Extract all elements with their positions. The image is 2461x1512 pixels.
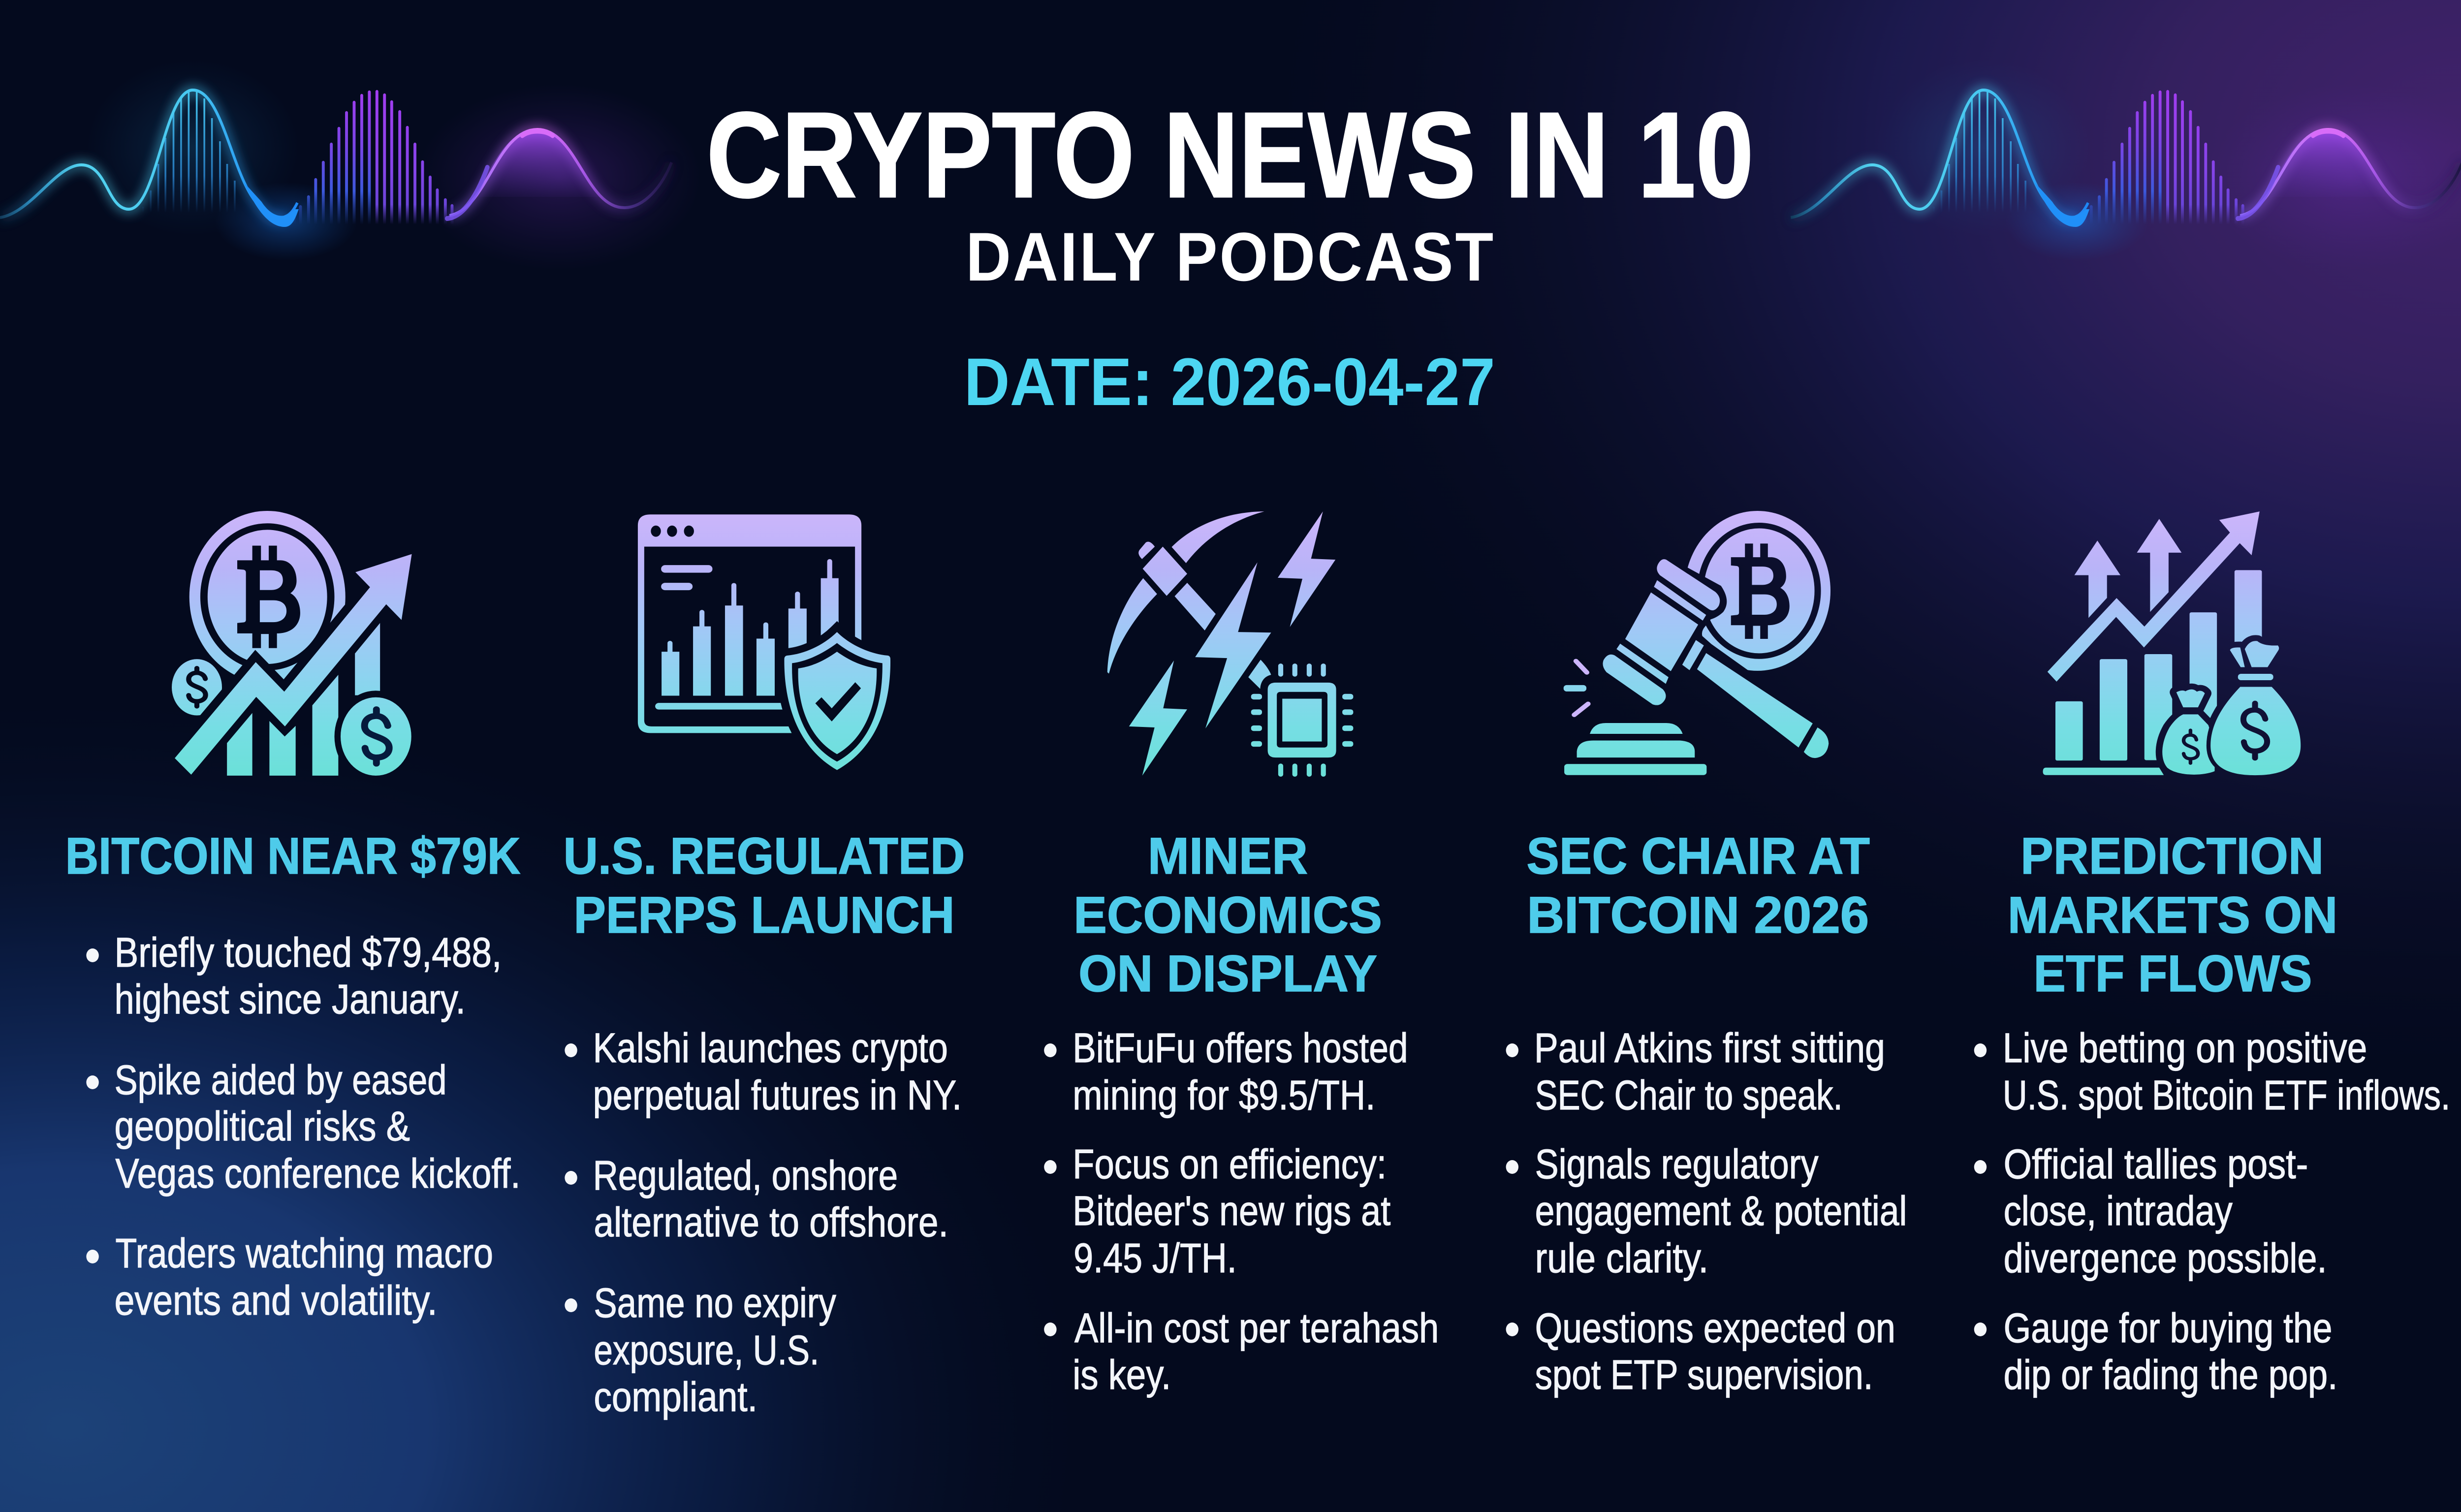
subtitle: DAILY PODCAST (966, 219, 1493, 295)
bullet 2: Official tallies post- (2004, 1141, 2308, 1188)
bullet 2 (565, 1153, 948, 1246)
bullet 3: is key. (1073, 1352, 1171, 1398)
heading (1073, 827, 1382, 1003)
bullet 3: Questions expected on (1535, 1305, 1895, 1352)
bullet 2 (1044, 1141, 1390, 1282)
heading: BITCOIN NEAR $79K (65, 827, 520, 885)
bullet 1: BitFuFu offers hosted (1073, 1025, 1408, 1071)
bullet 3 (1506, 1305, 1895, 1398)
bullet 3: Traders watching macro (115, 1230, 493, 1277)
panel: miner economics (1044, 511, 1439, 1398)
waveform: right (1791, 59, 2461, 271)
bullet 3 (1974, 1305, 2337, 1398)
bullet 2: 9.45 J/TH. (1073, 1235, 1237, 1282)
panel: bitcoin near 79k (65, 511, 520, 1324)
panel: sec chair (1506, 511, 1907, 1398)
heading (1526, 827, 1870, 944)
bullet 1: Paul Atkins first sitting (1534, 1025, 1885, 1071)
bullet 2: geopolitical risks & (115, 1103, 410, 1150)
bullet 3: events and volatility. (115, 1278, 437, 1324)
bullet 2: rule clarity. (1535, 1235, 1708, 1282)
bullet 1: Kalshi launches crypto (593, 1025, 948, 1071)
bullet 3: dip or fading the pop. (2004, 1352, 2337, 1398)
heading: MARKETS ON (2008, 886, 2337, 944)
icon: gavel and bitcoin (1564, 511, 1830, 775)
bullet 3 (565, 1280, 836, 1420)
heading: ECONOMICS (1073, 886, 1382, 944)
bullet 1 (565, 1025, 962, 1119)
bullet 3: spot ETP supervision. (1535, 1352, 1873, 1398)
title: CRYPTO NEWS IN 10 (706, 87, 1754, 223)
bullet 1 (1506, 1025, 1885, 1119)
bullet 2: divergence possible. (2004, 1235, 2327, 1282)
bullet 1 (86, 930, 502, 1023)
bullet 3: exposure, U.S. (594, 1327, 819, 1374)
bullet 1: highest since January. (115, 976, 466, 1023)
bullet 1: perpetual futures in NY. (593, 1072, 962, 1119)
bullet 1: Live betting on positive (2003, 1025, 2367, 1071)
bullet 1: Briefly touched $79,488, (115, 930, 502, 976)
bullet 3: compliant. (594, 1374, 757, 1420)
bullet 2: alternative to offshore. (594, 1199, 948, 1246)
bullet 2 (1974, 1141, 2327, 1282)
bullet 2: engagement & potential (1535, 1188, 1907, 1234)
bullet 2: Focus on efficiency: (1073, 1141, 1387, 1188)
heading: BITCOIN 2026 (1527, 886, 1869, 944)
panel: prediction markets (1974, 511, 2450, 1398)
bullet 2: Spike aided by eased (115, 1057, 447, 1103)
bullet 1: SEC Chair to speak. (1535, 1072, 1843, 1119)
bullet 3 (86, 1230, 493, 1324)
heading (564, 827, 965, 944)
icon: bitcoin coin with rising arrow (172, 511, 412, 776)
bullet 2: Vegas conference kickoff. (115, 1151, 520, 1197)
heading: SEC CHAIR AT (1526, 827, 1870, 885)
heading: MINER (1148, 827, 1308, 885)
icon: rising chart and money bags (2043, 511, 2301, 775)
heading: PREDICTION (2020, 827, 2324, 885)
bullet 1: mining for $9.5/TH. (1073, 1072, 1375, 1119)
waveform: left (0, 59, 702, 271)
bullet 1 (1974, 1025, 2450, 1119)
heading: ETF FLOWS (2034, 945, 2312, 1003)
heading: U.S. REGULATED (564, 827, 965, 885)
heading: PERPS LAUNCH (574, 886, 954, 944)
bullet 2: close, intraday (2004, 1188, 2233, 1234)
bullet 3 (1044, 1305, 1439, 1398)
heading (2008, 827, 2337, 1003)
bullet 3: Gauge for buying the (2004, 1305, 2332, 1352)
icon: trading window with shield (638, 514, 890, 770)
bullet 2 (86, 1057, 520, 1197)
bullet 2 (1506, 1141, 1907, 1282)
date: DATE: 2026-04-27 (964, 344, 1495, 419)
bullet 2: Bitdeer's new rigs at (1073, 1188, 1390, 1234)
heading: ON DISPLAY (1078, 945, 1377, 1003)
panel: u.s. regulated perps (564, 514, 965, 1420)
bullet 3: Same no expiry (594, 1280, 836, 1326)
bullet 2: Regulated, onshore (593, 1153, 898, 1199)
bullet 2: Signals regulatory (1535, 1141, 1819, 1188)
icon: pickaxe, lightning and chip (1107, 511, 1353, 777)
bullet 3: All-in cost per terahash (1074, 1305, 1439, 1352)
bullet 1 (1044, 1025, 1408, 1119)
